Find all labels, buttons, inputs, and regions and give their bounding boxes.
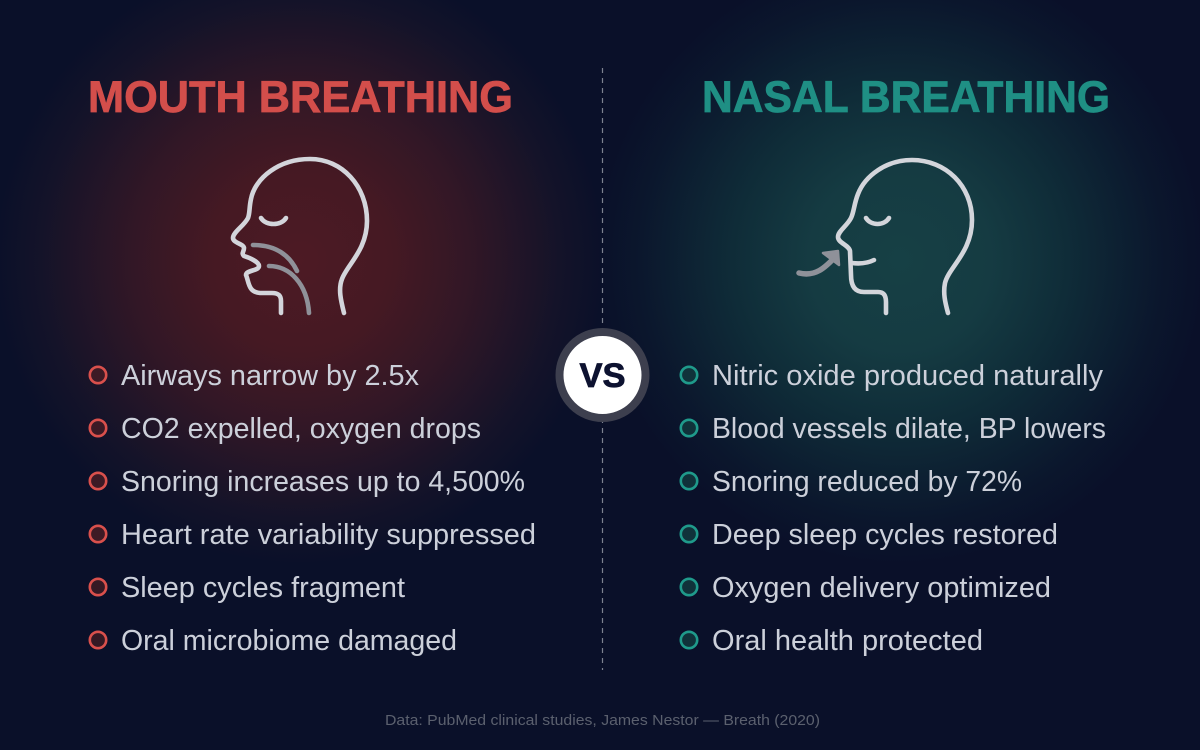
item: Oxygen delivery optimized [712,572,1051,604]
bullet [90,473,106,489]
bullet [90,526,106,542]
source note: Data: PubMed clinical studies, James Nestor — Breath (2020) [385,712,820,729]
center divider [602,68,604,670]
bullet [681,526,697,542]
item: Oral microbiome damaged [121,625,457,657]
bullet [90,579,106,595]
bullet [681,632,697,648]
list: mouth breathing effects [90,360,536,657]
item: Airways narrow by 2.5x [121,360,419,392]
bullet [90,367,106,383]
icon: head breathing through nose [799,160,972,313]
VS badge: VS [580,357,626,395]
item: Snoring reduced by 72% [712,466,1022,498]
heading: mouth breathing: MOUTH BREATHING [88,73,513,122]
item: Sleep cycles fragment [121,572,405,604]
bullet [90,632,106,648]
bullet [681,579,697,595]
item: Nitric oxide produced naturally [712,360,1104,392]
icon: head with open mouth [233,159,367,313]
item: Deep sleep cycles restored [712,519,1058,551]
list: nasal breathing benefits [681,360,1106,657]
item: Snoring increases up to 4,500% [121,466,525,498]
item: CO2 expelled, oxygen drops [121,413,481,445]
bullet [681,367,697,383]
panel glow: nasal breathing [600,0,1200,570]
item: Blood vessels dilate, BP lowers [712,413,1106,445]
bullet [90,420,106,436]
item: Oral health protected [712,625,983,657]
VS badge [560,332,646,418]
heading: nasal breathing: NASAL BREATHING [702,73,1110,122]
bullet [681,420,697,436]
bullet [681,473,697,489]
panel glow: mouth breathing [0,0,600,570]
item: Heart rate variability suppressed [121,519,536,551]
